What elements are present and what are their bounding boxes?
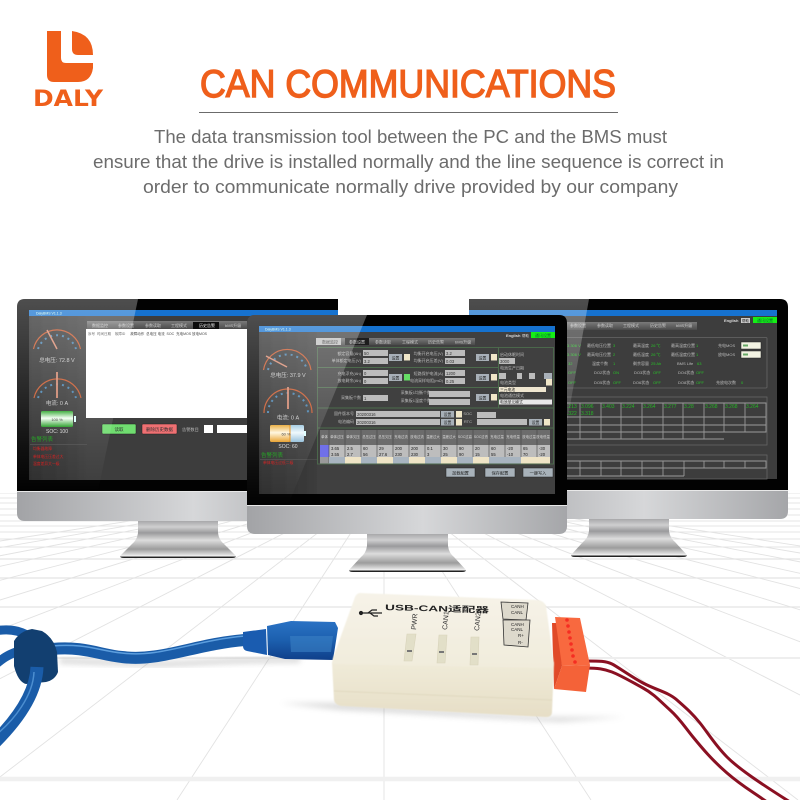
tabs: 历史告警 <box>199 322 215 328</box>
protection table: SOC过低 <box>474 434 489 439</box>
app window: 3.268 <box>725 404 738 410</box>
app window: 参数设置 <box>349 338 365 344</box>
stand <box>571 519 687 557</box>
app window: SOC: 100 <box>46 429 68 435</box>
status panel <box>540 338 767 388</box>
field labels: RTC <box>464 419 472 424</box>
usb symbol <box>360 610 382 616</box>
app window: 通讯设置 <box>535 332 551 338</box>
app window <box>259 326 555 494</box>
title underline <box>199 112 618 113</box>
app window: bMS升级 <box>455 338 471 344</box>
protection table: 2.7 <box>347 452 353 457</box>
app window: 3.306 V <box>567 343 581 348</box>
app window: 历史告警 <box>650 322 666 328</box>
stand <box>120 521 236 558</box>
app window: 1200 <box>446 371 456 376</box>
app window: 删除历史数据 <box>146 426 173 433</box>
app window: OFF <box>613 380 622 385</box>
led labels <box>411 611 483 631</box>
protection table: 总压过压 <box>362 434 376 439</box>
protection table: 60 <box>491 446 496 451</box>
description: The data transmission tool between the PC and the BMS must <box>154 126 667 147</box>
body <box>332 593 554 717</box>
app window: DO5状态 <box>594 379 610 385</box>
app window: 最高温度位置 <box>671 342 695 348</box>
tabs <box>87 321 247 329</box>
app window: 0 <box>364 379 367 384</box>
app window: 告警数目 <box>182 426 199 433</box>
pinout stickers <box>501 602 530 647</box>
app window: 60 % <box>281 432 291 436</box>
app window: 3.403 <box>602 404 615 410</box>
app window: 最低电压位置 <box>587 342 611 348</box>
app window: 3.277 <box>664 404 677 410</box>
protection table: 2.5 <box>347 446 353 451</box>
app window: 1 <box>613 361 616 366</box>
logo wordmark: DALY <box>33 87 104 112</box>
screen bezel <box>469 299 788 490</box>
temperature table <box>540 455 767 479</box>
protection table: 200 <box>411 446 419 451</box>
usb connector <box>243 621 338 660</box>
protection table: -20 <box>539 452 546 457</box>
screen bezel <box>17 299 338 491</box>
app window: 100 % <box>51 417 63 422</box>
glare <box>469 299 589 490</box>
app window: 3.096 <box>581 404 594 410</box>
cable strands <box>0 630 40 645</box>
cell voltage table <box>540 397 767 445</box>
app window: 通讯设置 <box>757 317 773 323</box>
app window: 参数读取 <box>375 338 391 344</box>
app window: 25 Ah <box>651 361 661 366</box>
protection table: 总压欠压 <box>378 434 392 439</box>
monitor: left, history <box>17 299 338 558</box>
app window: DO6状态 <box>633 379 649 385</box>
app window: SOC: 60 <box>278 444 298 450</box>
protection table: 0.1 <box>427 446 433 451</box>
action buttons: 一键写入 <box>530 470 547 476</box>
app window: 1 <box>696 343 699 348</box>
protection table: 90 <box>459 446 464 451</box>
app window: 序号 时间日期 故障ID 故障动作 总电压 电流 SOC 充电MOS 放电MOS <box>88 331 208 336</box>
app window: 单体电压压差过大 <box>33 454 64 459</box>
tabs: bMS升级 <box>225 322 241 328</box>
ferrite core <box>14 629 58 684</box>
app window: 参数读取 <box>597 322 613 328</box>
protection table: 30 <box>443 446 448 451</box>
logo <box>33 31 104 112</box>
led labels: CAN1 <box>442 611 451 630</box>
app window: 1 <box>696 352 699 357</box>
glare <box>17 299 138 491</box>
monitor: right, data view <box>469 299 788 557</box>
buttons <box>102 424 136 434</box>
app window: DalyBMS V1.1.3 <box>265 328 291 332</box>
app window: 充电MOS <box>718 342 735 348</box>
usb cable <box>0 630 300 665</box>
field labels: 电流采样电阻(mΩ) <box>410 377 444 383</box>
tabs: 数据监控 <box>92 322 108 328</box>
gauges <box>34 330 81 398</box>
usb-can adapter <box>332 593 590 717</box>
app window: 均衡器故障 <box>33 446 52 451</box>
protection table: 放电低温 <box>536 434 550 439</box>
app window: 电流: 0 A <box>46 399 68 407</box>
app window: 26 ℃ <box>651 352 661 357</box>
field labels: 采集板1均衡个数 <box>401 389 431 395</box>
app window: 3.28 <box>684 404 694 410</box>
app window: 总电压: 72.8 V <box>39 356 75 364</box>
app window: 1 <box>364 396 367 401</box>
field labels: 短路保护电流(A) <box>414 370 444 376</box>
protection table: -30 <box>539 446 546 451</box>
app window <box>469 310 777 479</box>
tabs: 工程模式 <box>171 322 187 328</box>
alarm list: 告警列表 <box>31 435 54 443</box>
field labels: 放电剩余(Ah) <box>337 377 362 383</box>
app window: 工程模式 <box>623 322 639 328</box>
protection table: 90 <box>459 452 464 457</box>
protection table: 放电过温 <box>522 434 536 439</box>
device shadow <box>280 703 625 722</box>
field labels <box>332 350 472 424</box>
protection table: 230 <box>411 452 419 457</box>
logo mark <box>47 31 93 82</box>
protection table: 温差过大 <box>426 434 440 439</box>
app window: OFF <box>696 380 705 385</box>
language and status: English <box>724 318 739 323</box>
app window: 最低温度位置 <box>671 351 695 357</box>
app window: BMS Life <box>677 361 694 366</box>
app window: 历史告警 <box>428 338 444 344</box>
field labels: 固件版本号 <box>334 410 354 416</box>
pinout stickers: CANL <box>511 627 524 632</box>
protection table: -20 <box>507 446 514 451</box>
app window: OFF <box>568 370 577 375</box>
protection table: 230 <box>395 452 403 457</box>
app window: 最高电压位置 <box>587 351 611 357</box>
field labels: SOC <box>463 411 472 416</box>
protection table: 单体 <box>321 434 328 439</box>
protection table: -10 <box>507 452 514 457</box>
field labels: 额定容量(Ah) <box>337 350 362 356</box>
tabs: 参数读取 <box>145 322 161 328</box>
app window: 26 ℃ <box>651 343 661 348</box>
app window: DO2状态 <box>594 369 610 375</box>
app window: 0 <box>741 380 744 385</box>
glare <box>247 315 367 505</box>
app window: 3.224 <box>622 404 635 410</box>
pinout stickers: R- <box>518 640 523 645</box>
language and status: English <box>506 333 521 338</box>
protection table: 27.6 <box>379 452 388 457</box>
monitor: centre, parameter settings <box>247 315 567 572</box>
app window: 20200316 <box>357 420 376 425</box>
product name: USB-CAN适配器 <box>385 602 489 615</box>
app window: 50 <box>364 351 369 356</box>
protection table: 65 <box>523 446 528 451</box>
app window: 温度个数 <box>592 360 608 366</box>
body top <box>332 593 554 668</box>
tabs <box>540 322 697 330</box>
connector shell <box>267 621 338 660</box>
app window: 3.306 V <box>567 352 581 357</box>
app window: 设置 <box>392 376 399 380</box>
field labels: 均衡开启压差(V) <box>414 357 444 363</box>
red wires <box>586 661 790 800</box>
side settings: 启动休眠时间 <box>500 351 524 357</box>
app window: 电池单元模式 <box>500 400 523 404</box>
set buttons <box>389 354 552 426</box>
app window: 0 <box>364 371 367 376</box>
app window: 最高温度 <box>633 342 649 348</box>
terminal block <box>552 617 590 692</box>
app window: 3000 <box>500 359 510 364</box>
title: CAN COMMUNICATIONS <box>200 63 616 106</box>
app window: 0.25 <box>446 379 455 384</box>
app window: 3.268 <box>705 404 718 410</box>
app window: DO3状态 <box>634 369 650 375</box>
side settings: 电池通信模式 <box>500 392 524 398</box>
app window: 63 <box>697 361 702 366</box>
battery <box>270 425 290 442</box>
tabs <box>316 338 475 345</box>
protection table: 55 <box>491 452 496 457</box>
app window: 3.2 <box>446 351 452 356</box>
app window: 设置 <box>479 356 486 360</box>
chin <box>469 490 788 519</box>
app window: 剩余容量 <box>633 360 649 366</box>
led labels: PWR <box>411 613 419 630</box>
protection table: 3.55 <box>331 452 340 457</box>
app window: ON <box>613 370 619 375</box>
alarm list: 告警列表 <box>261 451 284 459</box>
history table <box>86 329 256 418</box>
field labels: 采集板1温度个数 <box>401 397 431 403</box>
app window: DO4状态 <box>678 369 694 375</box>
description: ensure that the drive is installed normally and the line sequence is correct in <box>93 151 724 172</box>
app window: 设置 <box>479 376 486 380</box>
protection table <box>320 430 550 464</box>
protection table: SOC过高 <box>458 434 473 439</box>
side settings <box>500 351 524 398</box>
app window: 设置 <box>444 420 451 425</box>
app window: 3.2 <box>364 359 370 364</box>
gauges <box>264 349 312 413</box>
app window: 设置 <box>444 412 451 417</box>
action buttons <box>446 468 553 477</box>
app window: 2 <box>613 352 616 357</box>
app window: 帮助 <box>522 333 530 338</box>
field labels: 电池编码 <box>338 418 354 424</box>
protection table: 放电过流 <box>410 434 424 439</box>
app window: 3.318 <box>581 411 594 417</box>
app window: 总电压: 37.9 V <box>270 371 306 379</box>
app window: 0.03 <box>446 359 455 364</box>
app window: .213 <box>567 404 577 410</box>
app window: bMS升级 <box>676 322 692 328</box>
app window: 三元电池 <box>500 387 515 392</box>
pinout stickers: CANH <box>511 622 524 627</box>
action buttons: 保存配置 <box>492 470 508 476</box>
protection table: 3 <box>427 452 430 457</box>
field labels: 采集板个数 <box>341 394 361 400</box>
app window: 设置 <box>479 396 486 400</box>
app window: 3.264 <box>643 404 656 410</box>
app window: 最低温度 <box>633 351 649 357</box>
tabs: 参数设置 <box>118 322 134 328</box>
protection table: 200 <box>395 446 403 451</box>
strain relief <box>243 629 267 655</box>
protection table: 充电过流 <box>394 434 408 439</box>
screen bezel <box>247 315 567 505</box>
app window: OFF <box>696 370 705 375</box>
app window: 帮助 <box>742 318 750 323</box>
protection table: 充电过温 <box>490 434 504 439</box>
cable shadow <box>60 660 300 664</box>
app window: OFF <box>568 380 577 385</box>
app window: 放电MOS <box>718 351 735 357</box>
app window: 32 <box>568 361 573 366</box>
protection table: 单体过压 <box>330 434 344 439</box>
protection table: 60 <box>363 446 368 451</box>
app window: OFF <box>653 380 662 385</box>
app window: 电流: 0 A <box>277 414 299 422</box>
protection table: 29 <box>379 446 384 451</box>
app window: 数据监控 <box>322 338 338 344</box>
side settings: 电池类型 <box>500 379 516 385</box>
app window: DO8状态 <box>678 379 694 385</box>
app window: 工程模式 <box>402 338 418 344</box>
app window: 单体电压过低二级 <box>263 460 294 465</box>
app window: 3.264 <box>746 404 759 410</box>
app window <box>29 310 338 480</box>
battery <box>41 411 73 427</box>
protection table: 70 <box>523 452 528 457</box>
protection table: 20 <box>475 446 480 451</box>
body front <box>332 662 554 717</box>
protection table: 56 <box>363 452 368 457</box>
side settings: 电池生产日期 <box>500 364 524 370</box>
app window: 设置 <box>532 420 539 425</box>
app window: 3 <box>613 343 616 348</box>
input fields <box>356 350 535 425</box>
app window: 读取 <box>114 426 124 433</box>
lower cable <box>0 667 37 742</box>
protection table: 3.65 <box>331 446 340 451</box>
pinout stickers: CANH <box>511 604 524 609</box>
protection table: 充电低温 <box>506 434 520 439</box>
protection table: 单体欠压 <box>346 434 360 439</box>
app window: OFF <box>653 370 662 375</box>
floor grid <box>0 482 800 800</box>
app window: 温度差异大一级 <box>33 461 60 466</box>
field labels: 充电浮充(Ah) <box>337 370 362 376</box>
chin <box>17 491 338 521</box>
field labels: 单体额定电压(V) <box>332 357 362 363</box>
description: order to communicate normally drive provided by our company <box>143 176 679 197</box>
led windows <box>404 634 479 665</box>
led labels: CAN2 <box>474 612 483 631</box>
field labels: 均衡开启电压(V) <box>414 350 444 356</box>
pinout stickers: R+ <box>518 633 524 638</box>
action buttons: 加载配置 <box>452 470 469 476</box>
protection table: 25 <box>443 452 448 457</box>
app window: .322 <box>567 411 577 417</box>
chin <box>247 504 567 534</box>
indicators <box>404 354 552 426</box>
MOS switches <box>741 342 761 349</box>
protection table: 15 <box>475 452 480 457</box>
settings panels <box>318 348 554 464</box>
app window: DalyBMS V1.1.3 <box>36 312 62 316</box>
app window: 设置 <box>392 356 399 360</box>
app window: 参数设置 <box>570 322 586 328</box>
description <box>93 126 724 197</box>
app window: 20200316 <box>357 412 376 417</box>
stand <box>349 534 466 572</box>
protection table: 温差过大 <box>442 434 456 439</box>
green indicator <box>404 374 410 380</box>
app window: 充放电次数 <box>716 379 736 385</box>
pinout stickers: CANL <box>511 610 524 615</box>
